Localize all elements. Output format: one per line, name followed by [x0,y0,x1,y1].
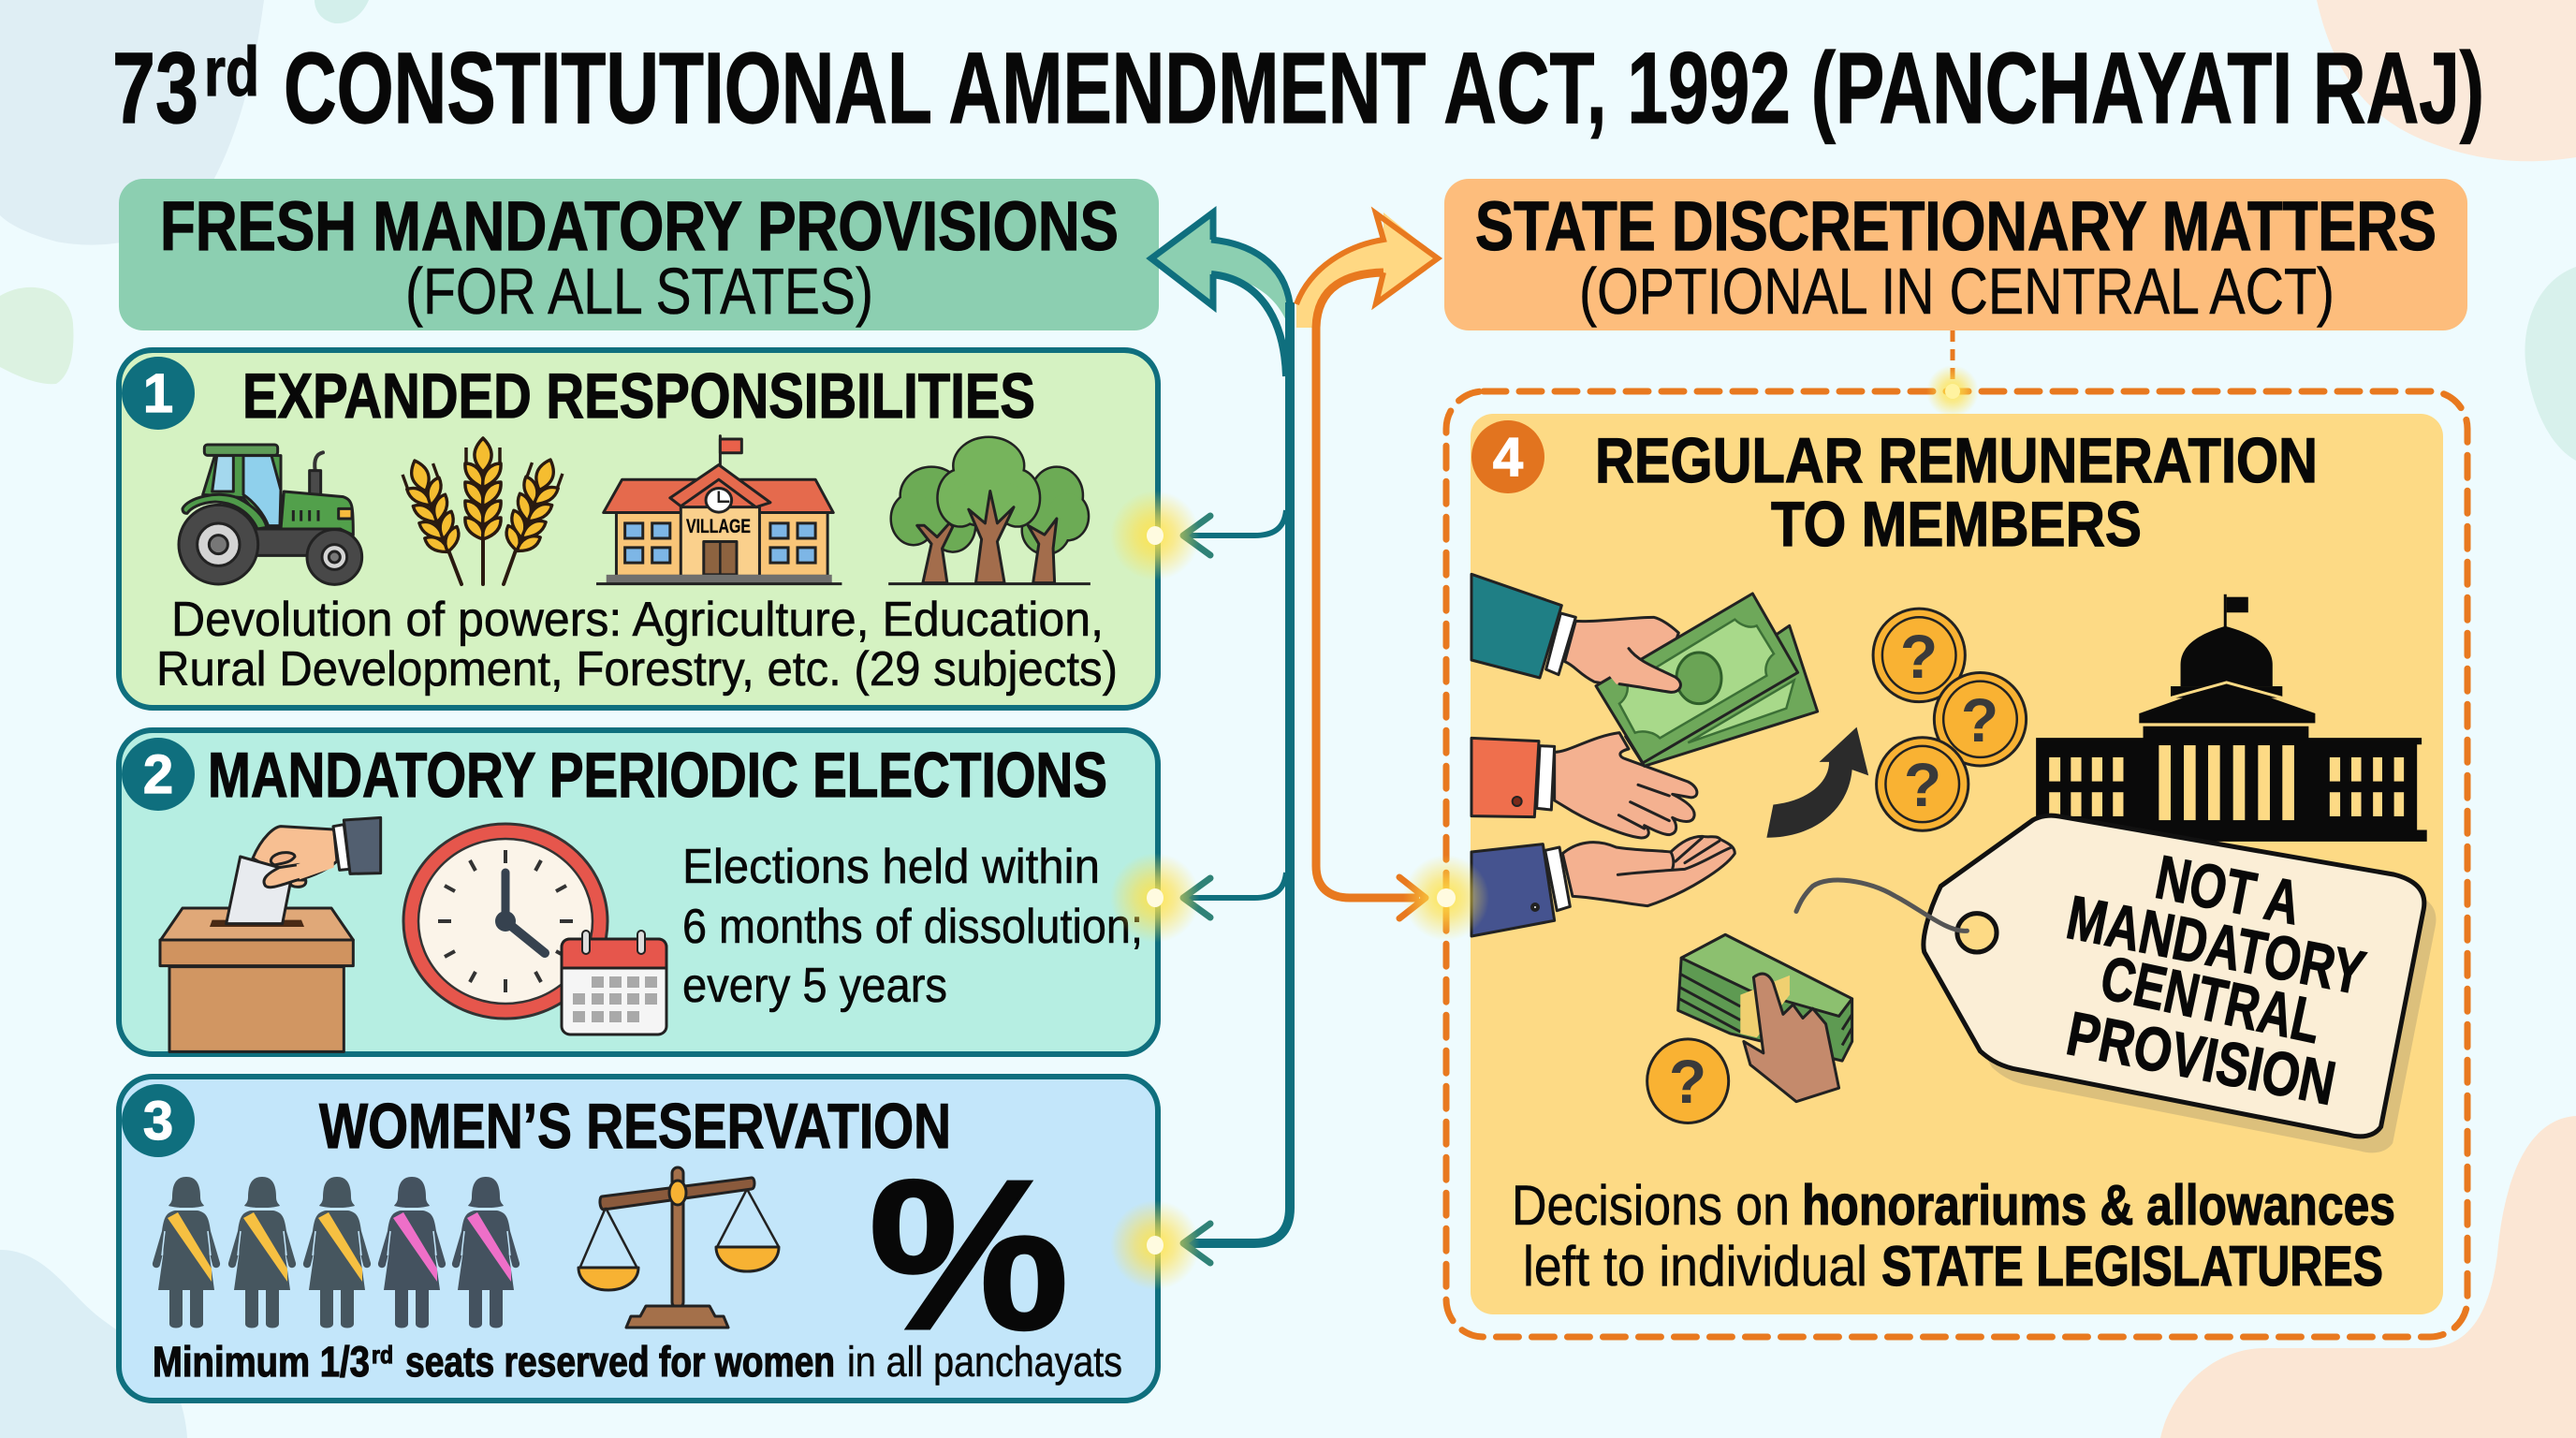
tag text: CENTRAL [2095,942,2327,1056]
heading 1: EXPANDED RESPONSIBILITIES [242,360,1035,432]
heading 3: WOMEN’S RESERVATION [319,1091,951,1162]
connector glow dots [1110,365,1979,1290]
icon: ballot box [160,817,381,1051]
question marks: ? [1961,685,1998,755]
badge 1: 1 [143,363,173,424]
heading 2: MANDATORY PERIODIC ELECTIONS [208,740,1107,811]
icon: wheat [399,438,566,584]
badge 4 [1471,420,1544,493]
panel 3: women's reservation [119,1077,1158,1401]
description 1: Devolution of powers: Agriculture, Education, [171,593,1104,647]
tag text: NOT A [2150,842,2306,937]
description 4: STATE LEGISLATURES [1881,1235,2383,1298]
icon: percent sign: % [869,1137,1069,1374]
icon: tractor [179,445,362,584]
icon: women with sashes [153,1177,520,1328]
badge 2: 2 [143,744,173,805]
panel: fresh mandatory provisions header: (FOR ALL STATES) [405,255,873,328]
tag text: PROVISION [2061,998,2341,1118]
question marks: ? [1900,622,1938,691]
badge 2 [122,738,195,811]
icon: trees [888,438,1090,584]
panel: state discretionary header: (OPTIONAL IN CENTRAL ACT) [1579,255,2334,328]
village label: VILLAGE [686,516,751,537]
illustration: hands holding money [1471,574,1818,936]
description 2: every 5 years [682,959,947,1013]
panel 4: regular remuneration [1446,330,2467,1337]
icon: village school [596,436,842,584]
question marks [1669,622,1998,1116]
description 4: Decisions on [1512,1174,1790,1237]
panel: state discretionary header [1444,179,2467,330]
cash stack [1678,934,1852,1102]
description 2: Elections held within [682,840,1100,894]
description 2: 6 months of dissolution; [682,900,1143,954]
tag text: MANDATORY [2061,882,2371,1007]
description 1 [156,593,1118,697]
icon: scales [578,1167,779,1328]
panel 1: expanded responsibilities [119,350,1158,708]
panel: fresh mandatory provisions header [119,179,1159,330]
question marks: ? [1669,1047,1706,1116]
description 4: left to individual [1523,1235,1867,1298]
description 4 [1512,1174,2395,1298]
heading 4: TO MEMBERS [1771,489,2142,560]
icon: clock [403,824,607,1019]
heading 4: REGULAR REMUNERATION [1595,425,2318,496]
title: 73 [112,31,198,144]
description 3: Minimum 1/3 [153,1338,370,1386]
badge 3 [122,1084,195,1157]
description 1: Rural Development, Forestry, etc. (29 subjects) [156,642,1118,697]
description 3: rd [372,1341,393,1369]
panel: fresh mandatory provisions header: FRESH MANDATORY PROVISIONS [160,187,1119,265]
title: rd [204,33,259,110]
icon: calendar [562,931,666,1034]
tag text [2061,842,2371,1118]
badge 4: 4 [1493,427,1523,488]
description 3 [153,1338,1122,1386]
arrow: teal connector [1151,213,1294,1263]
arrow: orange connector [1296,213,1440,918]
capitol building [2031,594,2427,842]
badge 1 [122,357,195,430]
description 3: in all panchayats [847,1338,1122,1386]
question marks: ? [1904,750,1941,819]
coins [1647,609,2027,1123]
description 3: seats reserved for women [405,1338,835,1386]
description 4: honorariums & allowances [1802,1174,2395,1237]
price tag [1796,815,2436,1152]
panel 2: mandatory periodic elections [119,730,1158,1054]
badge 3: 3 [143,1091,173,1152]
illustration: coins, arrow, cash, building, tag [1647,594,2436,1152]
description 2 [682,840,1143,1013]
heading 4 [1595,425,2318,560]
